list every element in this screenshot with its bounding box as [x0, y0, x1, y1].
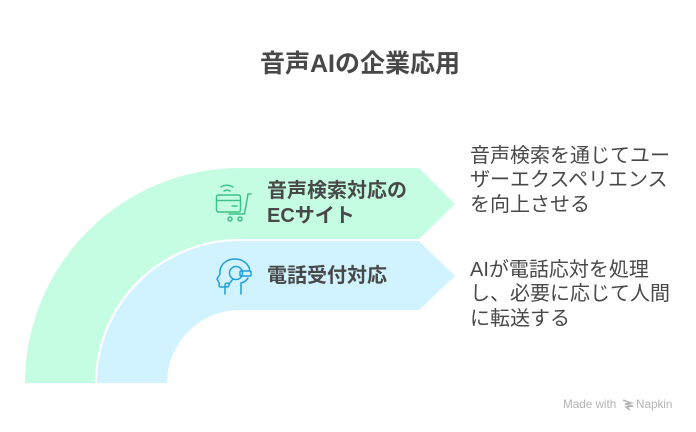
arrow band: phone support — [97, 241, 455, 383]
description: phone support: に転送する — [470, 308, 570, 330]
label: phone support: 電話受付対応 — [267, 265, 387, 287]
description: phone support — [470, 258, 670, 330]
watermark: Made with — [563, 398, 616, 411]
description: voice search: 音声検索を通じてユー — [470, 144, 670, 166]
icon: head with headset — [217, 259, 251, 294]
icon: wifi card and cart — [216, 185, 251, 221]
description: phone support: し、必要に応じて人間 — [470, 283, 670, 305]
description: voice search: ザーエクスペリエンス — [470, 169, 668, 191]
description: voice search: を向上させる — [470, 194, 590, 216]
title: 音声AIの企業応用 — [260, 50, 460, 78]
description: voice search — [470, 144, 670, 216]
watermark: Napkin — [636, 398, 672, 411]
arrow band: voice search — [25, 168, 455, 383]
watermark — [563, 398, 672, 411]
label: voice search EC: 音声検索対応の — [267, 180, 407, 202]
label: voice search EC — [267, 180, 407, 227]
label: voice search EC: ECサイト — [267, 205, 355, 227]
description: phone support: AIが電話応対を処理 — [470, 258, 649, 280]
